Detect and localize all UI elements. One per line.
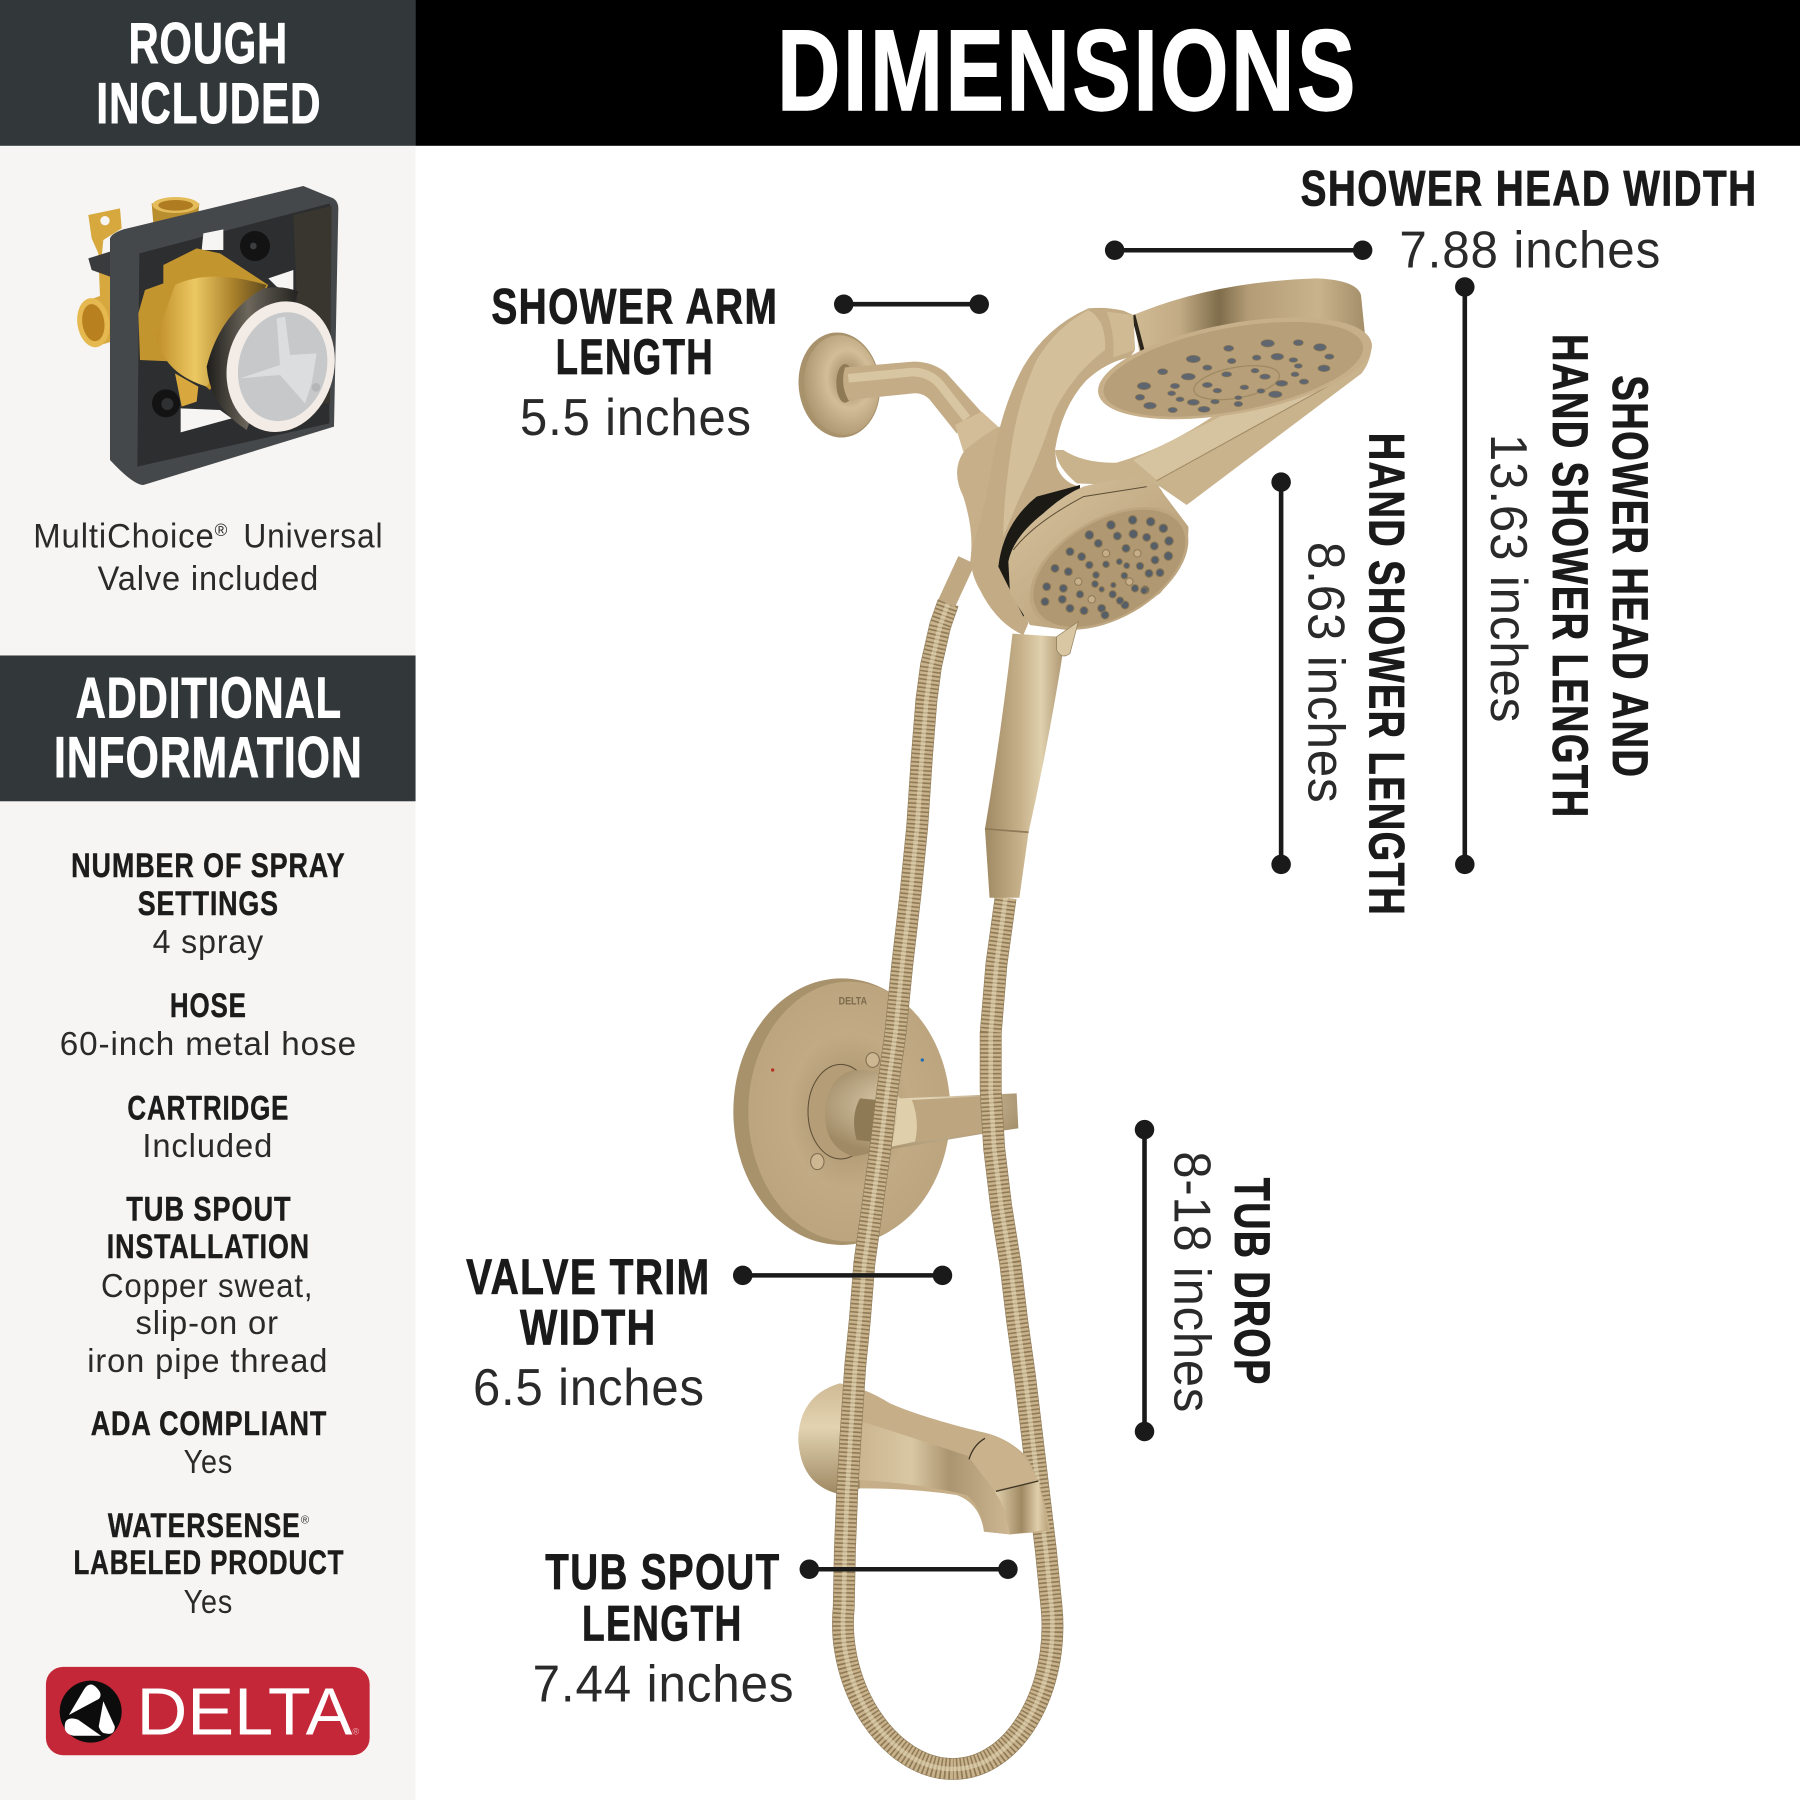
dimension: valve trim width: VALVE TRIM <box>466 1248 711 1305</box>
product: valve trim plate <box>733 978 1018 1245</box>
dimension: tub drop: 8-18 inches <box>1163 1151 1221 1413</box>
heading: rough included: ROUGH <box>129 12 288 76</box>
product: hose, right section <box>953 898 1052 1769</box>
dimension: tub drop <box>1135 1120 1281 1441</box>
spec: hose <box>60 987 357 1063</box>
dimension: tub spout length: 7.44 inches <box>533 1654 794 1712</box>
product: hand shower head <box>1008 478 1209 656</box>
dimension: valve trim width: WIDTH <box>520 1298 657 1355</box>
logo: delta: DELTA <box>137 1676 353 1750</box>
spec: ada compliant: ADA COMPLIANT <box>91 1405 327 1443</box>
hose connector <box>947 560 967 603</box>
panel: left sidebar <box>0 0 416 1800</box>
spec: watersense: WATERSENSE <box>108 1507 301 1545</box>
dimension: valve trim width <box>466 1248 952 1416</box>
dimension: tub spout length: LENGTH <box>582 1594 743 1651</box>
logo: delta <box>46 1667 370 1755</box>
logo: delta: ® <box>352 1727 359 1737</box>
valve caption: ® <box>215 520 228 540</box>
spec: spray settings: 4 spray <box>153 924 264 961</box>
spec: tub spout installation: slip-on or <box>135 1305 279 1342</box>
dimension: valve trim width: 6.5 inches <box>473 1358 705 1416</box>
spec: watersense: LABELED PRODUCT <box>73 1544 344 1582</box>
dimension: shower arm length: 5.5 inches <box>520 388 752 446</box>
spec: ada compliant: Yes <box>184 1444 233 1481</box>
top fitting <box>152 203 199 223</box>
dimension: tub spout length <box>533 1543 1018 1712</box>
product: shower arm and flange <box>793 328 1000 603</box>
spec: cartridge: CARTRIDGE <box>127 1089 289 1127</box>
nozzles <box>1041 516 1173 619</box>
dimension: tub drop: TUB DROP <box>1224 1178 1281 1386</box>
head rim <box>1133 278 1365 357</box>
product: tub spout <box>798 1383 1050 1534</box>
spec: cartridge <box>127 1089 289 1165</box>
spec: hose: HOSE <box>170 987 247 1025</box>
brass body <box>138 248 268 390</box>
spec: spray settings: SETTINGS <box>138 885 279 923</box>
dimension: shower arm length <box>491 278 989 446</box>
valve caption: MultiChoice <box>33 518 215 556</box>
left fitting <box>93 292 112 347</box>
spec: watersense <box>73 1507 344 1621</box>
lower loop arm <box>1055 343 1372 505</box>
spec: tub spout installation: iron pipe thread <box>87 1343 328 1380</box>
spec: tub spout installation <box>87 1190 328 1380</box>
dimension: hand shower length <box>1271 433 1416 916</box>
nozzles <box>1135 340 1334 413</box>
product: diverter bracket <box>971 308 1135 635</box>
heading: additional information <box>0 655 416 801</box>
spec: spray settings <box>71 847 346 961</box>
frame <box>110 186 338 485</box>
spec: tub spout installation: INSTALLATION <box>107 1228 310 1266</box>
icon: rough-in valve <box>74 186 348 485</box>
spec: watersense: Yes <box>184 1584 233 1621</box>
head face <box>1090 299 1380 438</box>
title bar: dimensions <box>416 0 1800 146</box>
spec: tub spout installation: TUB SPOUT <box>126 1190 292 1228</box>
dimension: shower head and hand shower length <box>1455 277 1659 874</box>
sprayer nubs <box>1075 550 1141 603</box>
dimension: shower head and hand shower length: HAND SHOWER LENGTH <box>1542 334 1599 818</box>
heading: additional information: ADDITIONAL <box>76 666 342 730</box>
cap <box>213 290 348 444</box>
product: hose, left section <box>843 603 953 1769</box>
spec: hose: 60-inch metal hose <box>60 1026 357 1063</box>
product: valve trim plate: DELTA <box>839 996 867 1008</box>
product: hand shower wand <box>985 634 1065 898</box>
dimension: shower head width <box>1105 159 1758 278</box>
dimension: shower head and hand shower length: SHOWER HEAD AND <box>1602 375 1659 778</box>
valve caption <box>33 518 383 598</box>
dimension: shower arm length: LENGTH <box>556 328 714 385</box>
dimension: shower head width: 7.88 inches <box>1399 220 1661 278</box>
valve caption: Universal <box>243 518 383 556</box>
spec: tub spout installation: Copper sweat, <box>101 1268 313 1305</box>
dimension: shower head and hand shower length: 13.63 inches <box>1480 434 1538 723</box>
valve caption: Valve included <box>98 560 319 598</box>
title bar: dimensions: DIMENSIONS <box>777 7 1358 135</box>
heading: rough included: INCLUDED <box>96 72 321 136</box>
collar <box>207 287 298 430</box>
spec: ada compliant <box>91 1405 327 1481</box>
spray trigger <box>1057 622 1078 656</box>
dimension: shower arm length: SHOWER ARM <box>491 278 778 335</box>
spec: spray settings: NUMBER OF SPRAY <box>71 847 346 885</box>
frame gaps <box>202 229 223 250</box>
dimension: hand shower length: HAND SHOWER LENGTH <box>1359 433 1416 916</box>
brass tab <box>88 208 122 297</box>
lever handle <box>825 1070 1018 1157</box>
dimension: tub spout length: TUB SPOUT <box>545 1543 781 1600</box>
spec: cartridge: Included <box>142 1128 273 1165</box>
dimension: hand shower length: 8.63 inches <box>1298 542 1356 804</box>
heading: additional information: INFORMATION <box>54 726 363 790</box>
fasteners <box>240 231 270 261</box>
spec: watersense: ® <box>301 1514 310 1526</box>
product: overhead shower head <box>1055 278 1380 505</box>
heading: rough included <box>0 0 416 146</box>
